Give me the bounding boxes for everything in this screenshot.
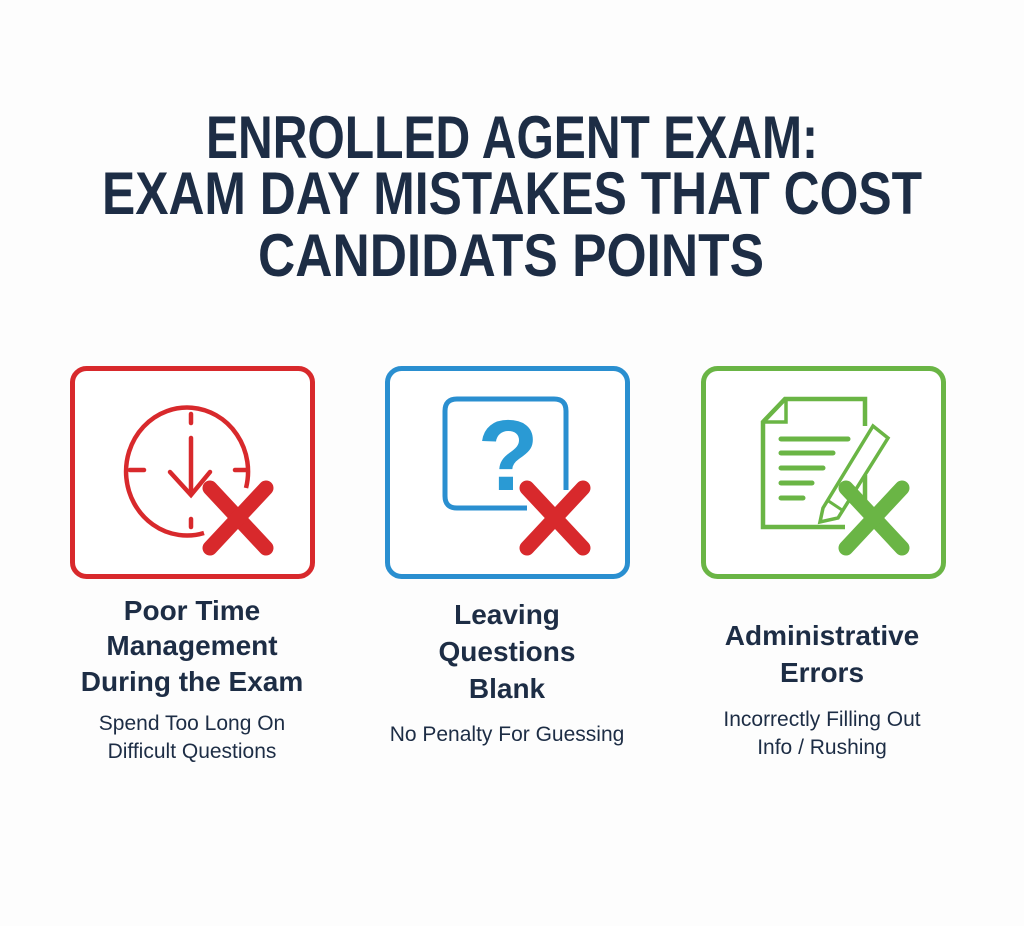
title: CANDIDATS POINTS <box>258 222 764 289</box>
heading + subtext: Poor Time <box>124 595 260 626</box>
heading + subtext: No Penalty For Guessing <box>390 723 624 746</box>
heading + subtext: Management <box>106 630 278 661</box>
heading + subtext: Questions <box>439 636 575 667</box>
panel: poor time management <box>70 366 315 763</box>
icon: clock with x <box>70 366 315 579</box>
heading + subtext: Info / Rushing <box>757 736 887 759</box>
icon: document pencil with x <box>701 366 946 579</box>
panel: administrative errors <box>701 366 946 759</box>
heading + subtext: Blank <box>469 673 546 704</box>
panel: leaving questions blank <box>385 366 630 746</box>
heading + subtext: During the Exam <box>81 666 303 697</box>
heading + subtext: Administrative <box>725 620 919 651</box>
title: ENROLLED AGENT EXAM: <box>206 104 818 171</box>
heading + subtext <box>81 595 303 763</box>
heading + subtext: Errors <box>780 657 864 688</box>
heading + subtext: Leaving <box>454 599 560 630</box>
heading + subtext: Incorrectly Filling Out <box>723 708 921 731</box>
title <box>102 104 922 289</box>
heading + subtext <box>390 599 624 746</box>
heading + subtext: Difficult Questions <box>108 740 276 763</box>
heading + subtext <box>723 620 921 759</box>
heading + subtext: Spend Too Long On <box>99 712 285 735</box>
icon: question box with x: ? <box>477 400 539 512</box>
icon: question box with x <box>385 366 630 579</box>
